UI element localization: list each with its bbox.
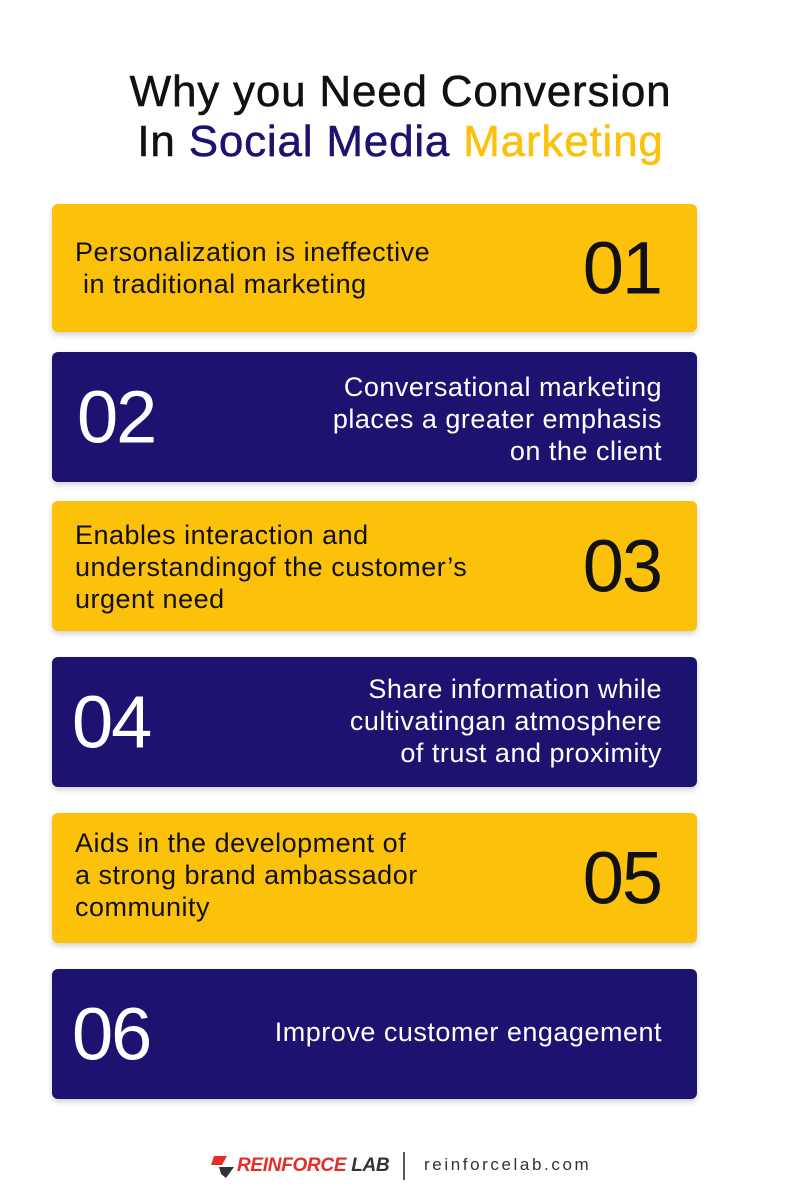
text 05: Aids in the development of [75,828,406,858]
text 04: Share information while [368,674,662,704]
text 02: on the client [510,436,662,466]
text 03 [75,520,467,614]
panel: 01 [52,204,697,332]
text 01 [75,237,430,299]
text 03: understandingof the customer’s [75,552,467,582]
text 06: Improve customer engagement [275,1017,662,1047]
text 01: in traditional marketing [83,269,367,299]
text 04 [350,674,662,768]
panel: 04 [52,657,697,787]
number 06: 06 [72,992,150,1076]
footer logo: REINFORCE LAB [237,1155,389,1176]
title: In Social Media Marketing [137,117,664,166]
number 05: 05 [583,836,661,920]
title: Why you Need Conversion [130,67,671,116]
panel: 03 [52,501,697,631]
icon: logo mark [211,1156,234,1178]
panel: 06 [52,969,697,1099]
text 04: of trust and proximity [400,738,662,768]
text 04: cultivatingan atmosphere [350,706,662,736]
title [130,67,671,166]
text 05 [75,828,418,922]
text 02: places a greater emphasis [333,404,662,434]
footer logo: reinforcelab.com [424,1155,591,1174]
panel: 05 [52,813,697,943]
number 02: 02 [77,376,155,458]
text 01: Personalization is ineffective [75,237,430,267]
panel: 02 [52,352,697,482]
text 05: a strong brand ambassador [75,860,418,890]
footer logo [211,1152,591,1180]
number 03: 03 [583,524,661,608]
number 01: 01 [583,226,661,310]
text 02 [333,372,662,466]
number 04: 04 [72,680,150,764]
text 03: Enables interaction and [75,520,369,550]
text 03: urgent need [75,584,225,614]
text 02: Conversational marketing [344,372,662,402]
text 05: community [75,892,210,922]
